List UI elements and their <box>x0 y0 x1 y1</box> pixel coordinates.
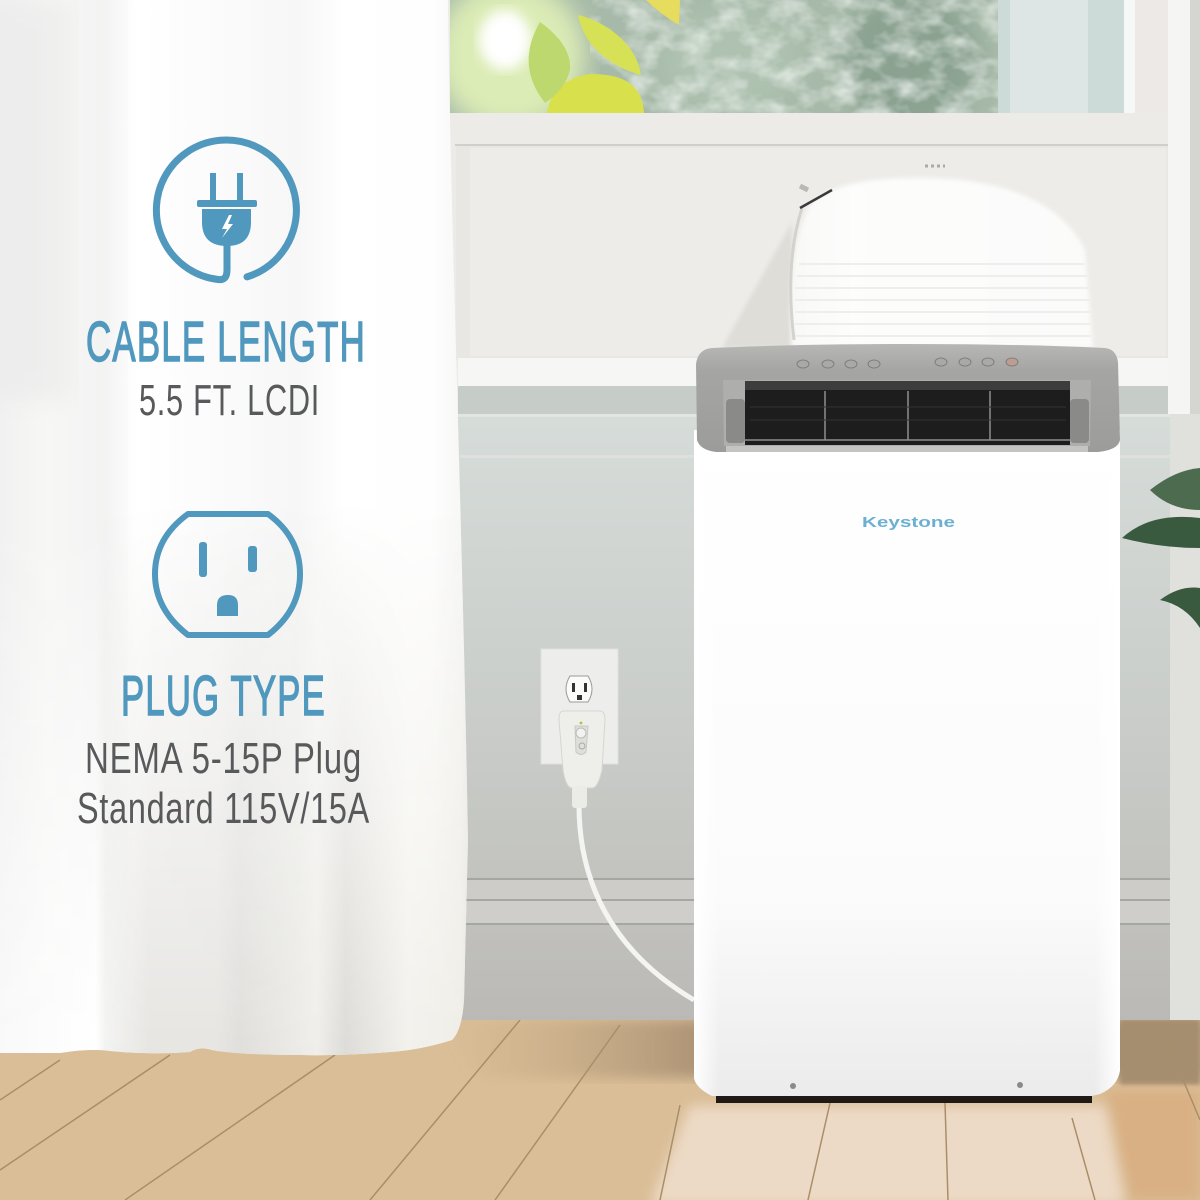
wall outlet and plug <box>541 649 694 1000</box>
exhaust hose and window vent <box>722 166 1093 348</box>
portable air conditioner <box>694 344 1120 1103</box>
text: 5.5 ft LCDI: 5.5 FT. LCDI <box>139 376 320 425</box>
power cord <box>579 805 694 1000</box>
grey top cap <box>696 344 1120 452</box>
floor shadow <box>716 1094 1092 1103</box>
wall plate <box>541 649 618 764</box>
text: NEMA plug: NEMA 5-15P Plug <box>85 734 362 783</box>
brand logo: Keystone <box>862 514 955 531</box>
LCDI plug <box>559 711 605 808</box>
icon: outlet <box>155 514 300 635</box>
text: standard voltage: Standard 115V/15A <box>77 784 370 833</box>
feet screws <box>790 1082 1023 1089</box>
control panel buttons <box>797 358 1018 368</box>
lower wall with wainscot panel <box>458 414 1170 1020</box>
white body <box>694 430 1120 1100</box>
icon: power plug in circle <box>156 140 296 280</box>
heading: cable length: CABLE LENGTH <box>86 310 366 374</box>
heading: plug type: PLUG TYPE <box>121 664 326 728</box>
air outlet <box>723 380 1091 452</box>
curtain <box>0 0 480 1060</box>
window frame and sill <box>450 0 1200 1020</box>
window with garden view <box>450 0 1135 113</box>
floor: wood planks <box>0 1020 1200 1200</box>
receptacle <box>566 676 592 702</box>
plant leaves at right <box>1122 468 1200 628</box>
